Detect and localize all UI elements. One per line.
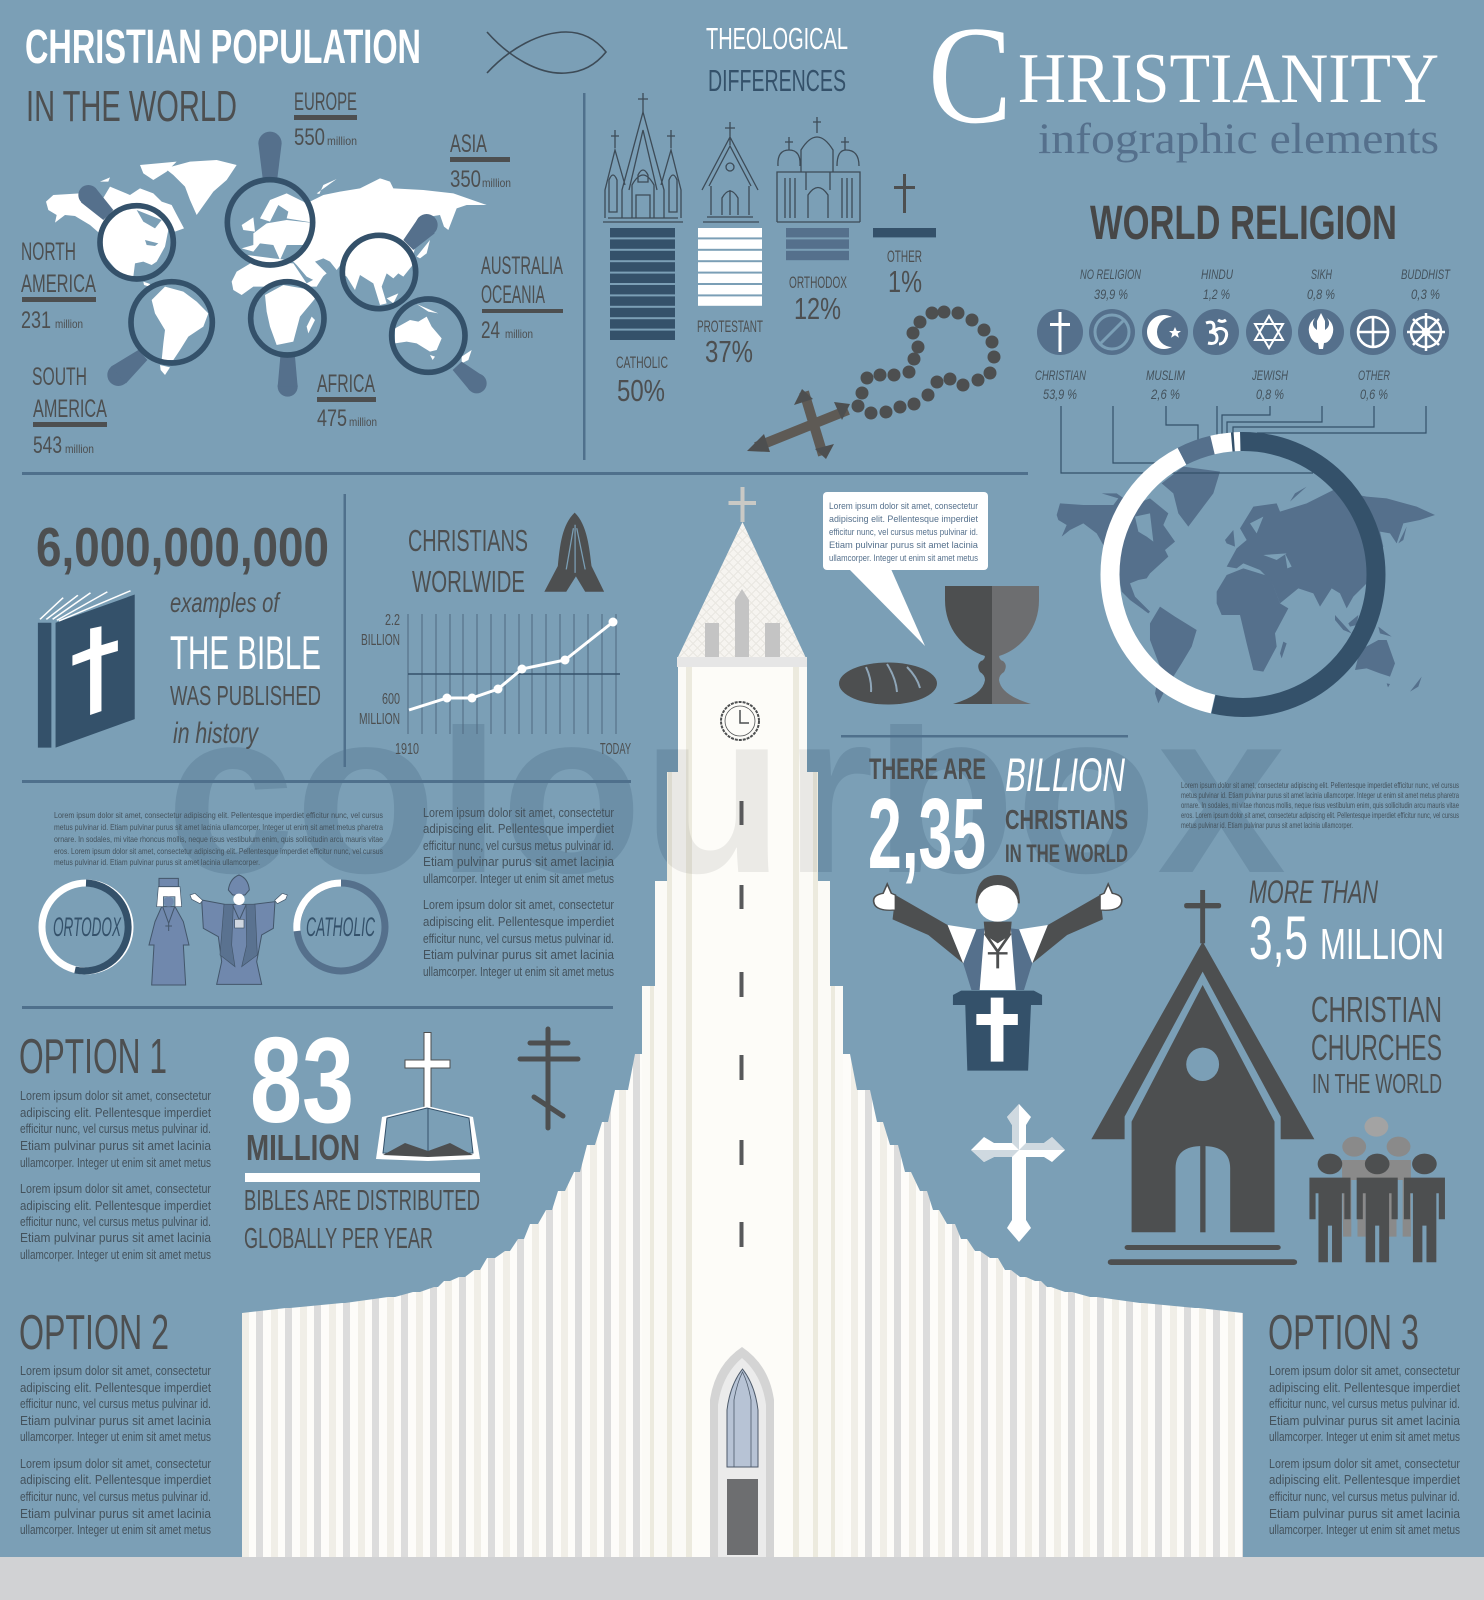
text block: two paragraphs centre left: Etiam pulvinar purus sit amet lacinia: [423, 947, 615, 962]
stat: 83 million bibles: 83: [250, 1012, 354, 1148]
text block: two paragraphs centre left: adipiscing elit. Pellentesque imperdiet: [423, 914, 614, 929]
stat: six billion bibles: in history: [173, 717, 259, 750]
option 2: Lorem ipsum dolor sit amet, consectetur: [20, 1456, 212, 1471]
labels: lower religions: OTHER: [1358, 367, 1390, 383]
stat: 2,35 billion christians: BILLION: [1005, 748, 1125, 801]
label: europe: million: [327, 134, 357, 148]
label: orthodox: [789, 273, 847, 326]
lens: europe: [227, 132, 317, 270]
label: australia oceania: 24: [481, 317, 500, 344]
cathedral top cross: [728, 487, 756, 522]
ring: ortodox: ORTODOX: [53, 912, 121, 942]
stat: six billion bibles: 6,000,000,000: [36, 516, 329, 578]
labels: upper religions: SIKH: [1311, 266, 1333, 282]
stat: 83 million bibles: GLOBALLY PER YEAR: [244, 1223, 433, 1255]
cathedral illustration: [242, 487, 1243, 1557]
option 1: adipiscing elit. Pellentesque imperdiet: [20, 1198, 211, 1213]
ring: catholic: CATHOLIC: [306, 912, 375, 942]
stat: 83 million bibles: BIBLES ARE DISTRIBUTED: [244, 1185, 480, 1217]
labels: lower religions: [1035, 367, 1390, 402]
option 1: Lorem ipsum dolor sit amet, consectetur: [20, 1181, 212, 1196]
label: south america: AMERICA: [33, 395, 107, 423]
label: australia oceania: OCEANIA: [481, 281, 545, 309]
label: protestant: PROTESTANT: [697, 317, 763, 336]
label: protestant: [697, 317, 763, 369]
icon: congregation: [1309, 1117, 1445, 1262]
labels: lower religions: 0,6 %: [1360, 386, 1388, 402]
label: other: OTHER: [887, 247, 922, 266]
icon: bread: [839, 662, 937, 704]
option 3: Etiam pulvinar purus sit amet lacinia: [1269, 1413, 1461, 1428]
heading: christians worldwide: WORLWIDE: [412, 564, 525, 599]
option 2: efficitur nunc, vel cursus metus pulvinar id.: [20, 1396, 211, 1411]
label: north america: million: [55, 317, 83, 331]
text block: two paragraphs centre left: Lorem ipsum dolor sit amet, consectetur: [423, 805, 615, 820]
text block: small paragraph right: [1181, 780, 1459, 830]
text block: two paragraphs centre left: Etiam pulvinar purus sit amet lacinia: [423, 854, 615, 869]
option 1: Etiam pulvinar purus sit amet lacinia: [20, 1138, 212, 1153]
option 2: adipiscing elit. Pellentesque imperdiet: [20, 1472, 211, 1487]
labels: upper religions: HINDU: [1201, 266, 1234, 282]
speech bubble: ullamcorper. Integer ut enim sit amet metus: [829, 553, 978, 564]
label: catholic: CATHOLIC: [616, 353, 668, 372]
icon: cross other: [894, 174, 915, 213]
icon: protestant church: [702, 122, 759, 222]
label: south america: 543: [33, 432, 62, 459]
stat: six billion bibles: examples of: [170, 587, 281, 618]
label: australia oceania: [481, 252, 563, 344]
label: europe: [294, 88, 357, 151]
stat: 83 million bibles: MILLION: [246, 1127, 360, 1168]
icon: open bible with cross: [376, 1032, 480, 1161]
watermark: colourbox: [166, 663, 1286, 922]
title: christianity: C: [928, 0, 1012, 153]
text block: small paragraph left: ornare. In sodales, mi vitae rhoncus mollis, neque risus vestibulum enim, quis sollicitudin arcu mauris vitae: [54, 834, 383, 844]
heading: theological differences: [706, 21, 848, 98]
option 1: efficitur nunc, vel cursus metus pulvinar id.: [20, 1121, 211, 1136]
stat: 83 million bibles: [244, 1012, 480, 1255]
label: australia oceania: million: [505, 327, 533, 341]
label: south america: SOUTH: [32, 363, 87, 391]
lens: asia: [342, 214, 438, 309]
icons: religion symbols: [1037, 309, 1449, 355]
labels: lower religions: 53,9 %: [1043, 386, 1077, 402]
labels: upper religions: 0,8 %: [1307, 286, 1335, 302]
labels: lower religions: CHRISTIAN: [1035, 367, 1087, 383]
connector lines: [1061, 406, 1426, 473]
label: europe: EUROPE: [294, 88, 357, 116]
speech bubble: Lorem ipsum dolor sit amet, consectetur: [829, 501, 978, 512]
icon: rosary: [747, 306, 1000, 459]
option 1: efficitur nunc, vel cursus metus pulvinar id.: [20, 1214, 211, 1229]
bar: catholic 50%: [610, 228, 675, 340]
subtitle: infographic elements: [1038, 116, 1439, 163]
text block: small paragraph left: [54, 810, 383, 867]
stat: six billion bibles: THE BIBLE: [170, 626, 321, 679]
label: orthodox: 12%: [794, 291, 841, 326]
heading: theological differences: THEOLOGICAL: [706, 21, 848, 56]
option 2: Etiam pulvinar purus sit amet lacinia: [20, 1506, 212, 1521]
icon: white cross: [971, 1104, 1065, 1242]
label: north america: NORTH: [21, 238, 76, 266]
line chart: christians worldwide: BILLION: [361, 632, 400, 649]
option 3: adipiscing elit. Pellentesque imperdiet: [1269, 1380, 1460, 1395]
figure: catholic bishop: [190, 875, 287, 984]
label: catholic: [616, 353, 668, 408]
text block: two paragraphs centre left: ullamcorper. Integer ut enim sit amet metus: [423, 871, 614, 886]
text block: two paragraphs centre left: Lorem ipsum dolor sit amet, consectetur: [423, 897, 615, 912]
stat: 2,35 billion christians: IN THE WORLD: [1005, 840, 1128, 868]
label: north america: 231: [21, 307, 51, 334]
icon: catholic cathedral: [603, 93, 683, 222]
label: asia: 350: [450, 166, 481, 193]
label: south america: million: [65, 442, 94, 456]
heading: christians worldwide: CHRISTIANS: [408, 523, 528, 558]
text block: two paragraphs centre left: efficitur nunc, vel cursus metus pulvinar id.: [423, 838, 614, 853]
label: asia: ASIA: [450, 130, 487, 158]
option 2: ullamcorper. Integer ut enim sit amet metus: [20, 1429, 211, 1444]
icon: fish: [487, 32, 606, 73]
cathedral body: [242, 667, 1243, 1557]
label: africa: million: [349, 415, 377, 429]
cathedral door and window: [710, 1347, 774, 1557]
text block: two paragraphs centre left: ullamcorper. Integer ut enim sit amet metus: [423, 964, 614, 979]
title: christianity: [928, 0, 1439, 153]
label: protestant: 37%: [705, 334, 753, 369]
ring: ortodox: [42, 883, 130, 971]
stat: six billion bibles: WAS PUBLISHED: [170, 680, 321, 711]
line chart: christians worldwide: 2.2: [385, 612, 400, 629]
option 2: Lorem ipsum dolor sit amet, consectetur: [20, 1363, 212, 1378]
icon: bible book: [38, 591, 135, 748]
stat: 2,35 billion christians: [868, 748, 1128, 890]
figure: orthodox priest: [149, 878, 189, 985]
option 2: Etiam pulvinar purus sit amet lacinia: [20, 1413, 212, 1428]
labels: upper religions: 39,9 %: [1094, 286, 1128, 302]
option 3: adipiscing elit. Pellentesque imperdiet: [1269, 1472, 1460, 1487]
watermark over tower: colourbox: [166, 663, 1286, 922]
labels: upper religions: BUDDHIST: [1401, 266, 1451, 282]
tower side columns: [642, 667, 843, 1557]
stat: six billion bibles: [36, 516, 329, 750]
labels: lower religions: 2,6 %: [1150, 386, 1180, 402]
heading: christian population: [25, 21, 421, 131]
text block: two paragraphs centre left: efficitur nunc, vel cursus metus pulvinar id.: [423, 931, 614, 946]
ground strip: [0, 1557, 1484, 1600]
label: asia: [450, 130, 511, 193]
label: north america: [21, 238, 96, 334]
option 2: efficitur nunc, vel cursus metus pulvinar id.: [20, 1489, 211, 1504]
text block: two paragraphs centre left: [423, 805, 615, 979]
option 2: OPTION 2: [19, 1306, 169, 1360]
stat: more than 3,5 million churches: MORE THAN: [1249, 874, 1379, 910]
label: asia: million: [482, 176, 511, 190]
line chart: christians worldwide: MILLION: [359, 711, 400, 728]
heading: christian population: IN THE WORLD: [26, 82, 237, 131]
option 1: adipiscing elit. Pellentesque imperdiet: [20, 1105, 211, 1120]
ring: catholic: [297, 883, 385, 971]
label: other: 1%: [888, 264, 922, 299]
speech bubble: efficitur nunc, vel cursus metus pulvinar id.: [829, 527, 978, 538]
label: north america: AMERICA: [21, 270, 96, 298]
lens: africa: [250, 281, 325, 397]
labels: upper religions: [1080, 266, 1451, 302]
title: christianity: HRISTIANITY: [1018, 40, 1439, 118]
text block: small paragraph right: metus pulvinar id. Etiam pulvinar purus sit amet lacinia ullamcorper.: [1181, 820, 1353, 830]
world map: dark: [1057, 467, 1435, 703]
option 1: ullamcorper. Integer ut enim sit amet metus: [20, 1247, 211, 1262]
heading: theological differences: DIFFERENCES: [708, 63, 846, 98]
label: south america: [32, 363, 107, 459]
option 2: adipiscing elit. Pellentesque imperdiet: [20, 1380, 211, 1395]
line chart: christians worldwide: [359, 612, 631, 758]
option 1: OPTION 1: [19, 1030, 167, 1084]
speech bubble: [823, 492, 988, 646]
labels: lower religions: JEWISH: [1251, 367, 1289, 383]
map silhouette: [46, 160, 487, 375]
text block: two paragraphs centre left: adipiscing elit. Pellentesque imperdiet: [423, 821, 614, 836]
lens: south america: [107, 281, 213, 386]
option 2: [19, 1306, 212, 1537]
stat: more than 3,5 million churches: [1249, 874, 1444, 1099]
figure: pastor at pulpit: [874, 875, 1122, 1071]
option 1: Etiam pulvinar purus sit amet lacinia: [20, 1230, 212, 1245]
label: catholic: 50%: [617, 373, 665, 408]
option 1: Lorem ipsum dolor sit amet, consectetur: [20, 1088, 212, 1103]
speech bubble: adipiscing elit. Pellentesque imperdiet: [829, 514, 978, 525]
speech bubble: Etiam pulvinar purus sit amet lacinia: [829, 540, 979, 551]
text block: small paragraph left: metus pulvinar id. Etiam pulvinar purus sit amet lacinia ullamcorper. Integer ut enim sit amet metus pharetra: [54, 822, 383, 832]
clock: [721, 702, 759, 740]
line chart: christians worldwide: 1910: [395, 741, 419, 758]
label: africa: [317, 370, 377, 432]
line chart: christians worldwide: 600: [382, 691, 400, 708]
text block: small paragraph left: eros. Lorem ipsum dolor sit amet, consectetur adipiscing elit. Pellentesque imperdiet efficitur nunc, vel cursus: [54, 846, 383, 856]
icon: orthodox cross: [520, 1029, 578, 1128]
option 2: ullamcorper. Integer ut enim sit amet metus: [20, 1522, 211, 1537]
labels: lower religions: MUSLIM: [1146, 367, 1185, 383]
bar: other 1%: [873, 228, 936, 237]
labels: lower religions: 0,8 %: [1256, 386, 1284, 402]
stat: more than 3,5 million churches: 3,5: [1249, 904, 1308, 972]
labels: upper religions: 0,3 %: [1411, 286, 1440, 302]
stat: 2,35 billion christians: CHRISTIANS: [1005, 804, 1128, 835]
labels: upper religions: NO RELIGION: [1080, 266, 1142, 282]
option 3: [1268, 1306, 1461, 1537]
option 1: ullamcorper. Integer ut enim sit amet metus: [20, 1155, 211, 1170]
world map: white with magnifying lenses: [46, 132, 487, 397]
label: australia oceania: AUSTRALIA: [481, 252, 563, 280]
bar: orthodox 12%: [786, 228, 849, 260]
label: other: [887, 247, 922, 299]
heading: christian population: CHRISTIAN POPULATION: [25, 21, 421, 74]
lens: australia: [391, 298, 487, 393]
label: europe: 550: [294, 124, 325, 151]
centre dashes: [740, 801, 744, 1247]
icon: church silhouette: [1091, 890, 1314, 1265]
lens: north america: [78, 185, 180, 283]
option 1: [19, 1030, 212, 1262]
labels: upper religions: 1,2 %: [1203, 286, 1230, 302]
heading: christians worldwide: [408, 523, 528, 599]
label: orthodox: ORTHODOX: [789, 273, 847, 292]
label: africa: AFRICA: [317, 370, 375, 398]
icon: chalice: [945, 586, 1039, 704]
line chart: christians worldwide: TODAY: [600, 741, 631, 758]
donut chart: world religion: [1110, 442, 1376, 708]
stat: 2,35 billion christians: 2,35: [868, 778, 986, 890]
text block: small paragraph left: metus pulvinar id. Etiam pulvinar purus sit amet lacinia ullamcorper.: [54, 857, 260, 867]
text block: small paragraph left: Lorem ipsum dolor sit amet, consectetur adipiscing elit. Pellentesque imperdiet efficitur nunc, vel cursus: [54, 810, 383, 820]
label: africa: 475: [317, 405, 347, 432]
icon: orthodox church: [777, 117, 860, 222]
stat: 2,35 billion christians: THERE ARE: [869, 753, 986, 786]
icon: praying hands: [544, 513, 604, 592]
cathedral roof: [678, 522, 806, 657]
option 3: Etiam pulvinar purus sit amet lacinia: [1269, 1506, 1461, 1521]
bar: protestant 37%: [698, 228, 762, 306]
